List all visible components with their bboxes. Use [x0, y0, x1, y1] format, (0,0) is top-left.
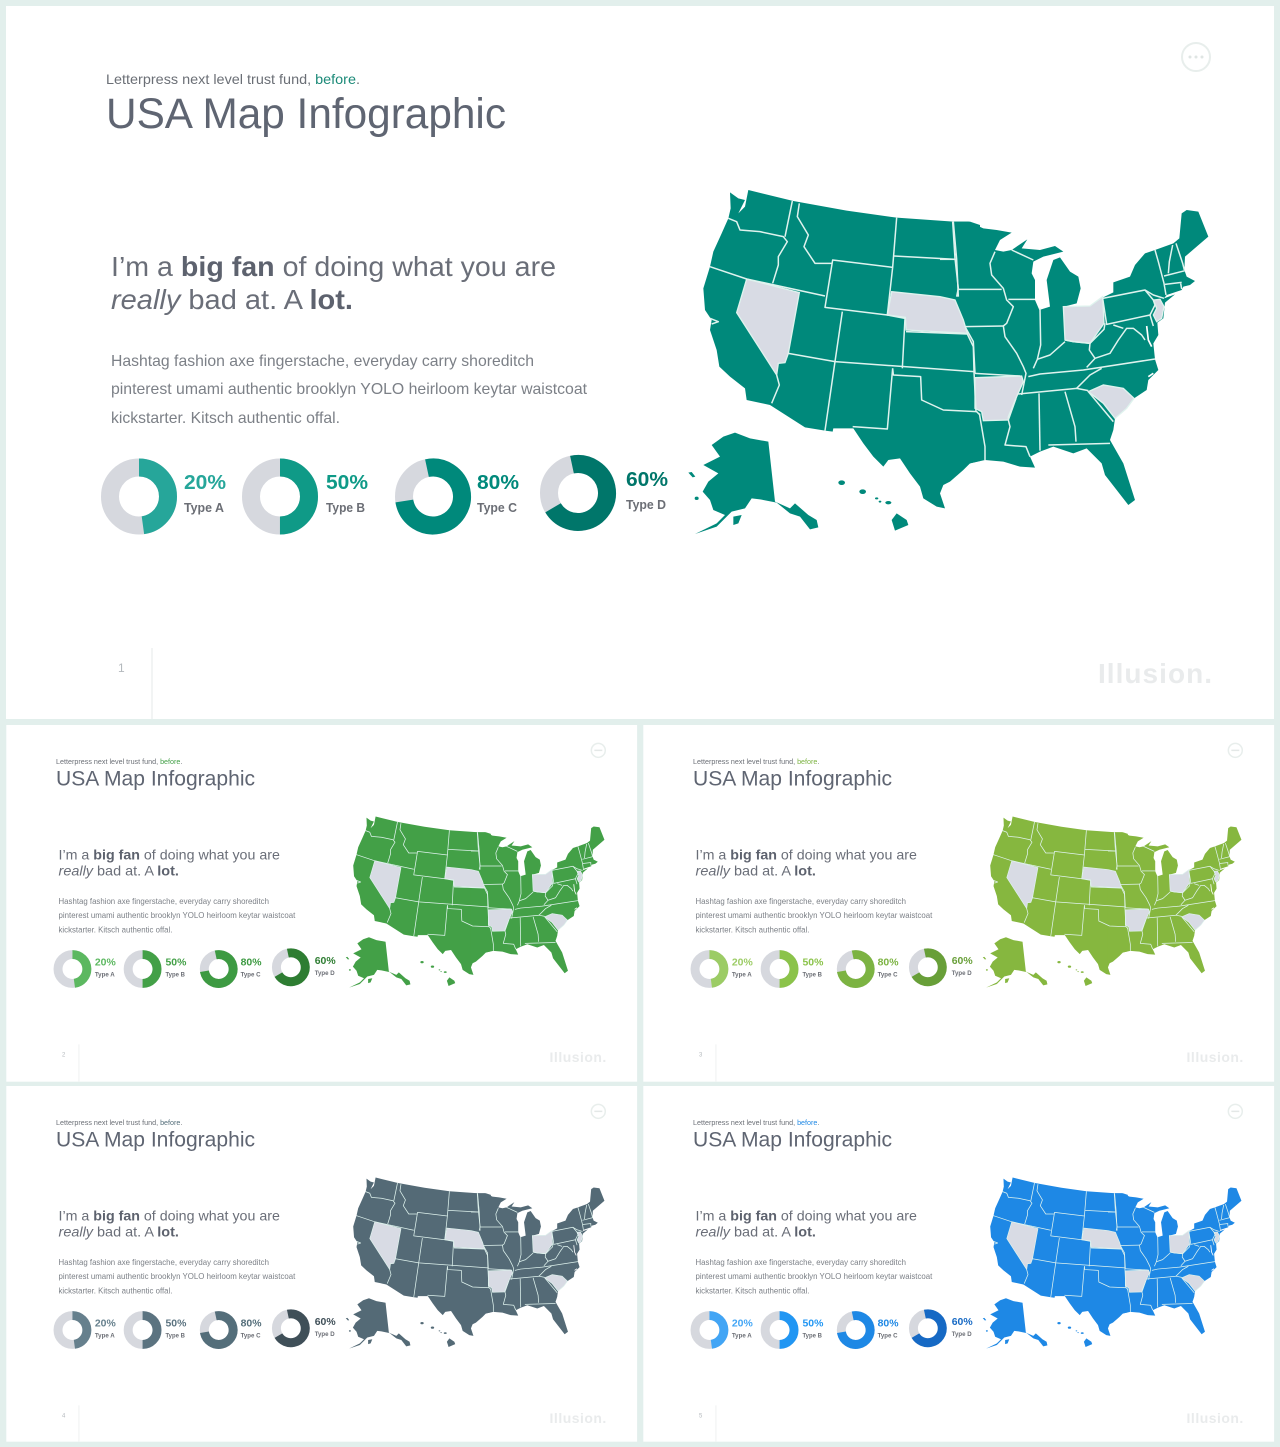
donut: Type B: 50%	[165, 1318, 187, 1329]
heading line two: really bad at. A lot.	[696, 863, 816, 879]
donut: Type D: 60%	[626, 469, 668, 491]
title: USA Map Infographic	[106, 90, 506, 138]
donut: Type C: Type C	[241, 972, 261, 979]
body text: Hashtag fashion axe fingerstache, everyday carry shoreditch	[59, 897, 269, 906]
body text: Hashtag fashion axe fingerstache, everyday carry shoreditch	[696, 1258, 906, 1267]
donut: Type A: 20%	[95, 957, 116, 968]
donut: Type A	[58, 1316, 116, 1344]
heading: I’m a big fan of doing what you are	[59, 846, 280, 862]
donut: Type B: Type B	[326, 501, 365, 515]
body text: Hashtag fashion axe fingerstache, everyday carry shoreditch	[59, 1258, 269, 1267]
title: USA Map Infographic	[693, 1128, 892, 1152]
panel: lime slide	[643, 725, 1274, 1082]
body text: Hashtag fashion axe fingerstache, everyday carry shoreditch	[696, 897, 906, 906]
subtitle: Letterpress next level trust fund, before.	[693, 759, 819, 766]
donut: Type D	[544, 459, 668, 527]
panel: blue slide	[643, 1086, 1274, 1442]
donut: Type D: 60%	[952, 956, 973, 967]
donut: Type B: Type B	[802, 1333, 822, 1340]
body text: Hashtag fashion axe fingerstache, everyday carry shoreditch	[111, 353, 534, 370]
title: USA Map Infographic	[56, 1128, 255, 1152]
donut: Type C: Type C	[477, 501, 517, 515]
donut: Type C	[839, 952, 899, 986]
body text: kickstarter. Kitsch authentic offal.	[59, 1286, 172, 1295]
donut: Type C	[202, 1313, 262, 1347]
donut: Type D: Type D	[626, 498, 666, 512]
donut: Type B: 50%	[802, 1318, 824, 1329]
heading line two: really bad at. A lot.	[111, 284, 353, 315]
donut: Type C: 80%	[477, 472, 519, 494]
donut: Type D	[274, 950, 336, 984]
panel: slate slide	[6, 1086, 637, 1442]
body text: kickstarter. Kitsch authentic offal.	[59, 925, 172, 934]
USA map	[983, 817, 1241, 988]
heading: I’m a big fan of doing what you are	[696, 846, 917, 862]
title: USA Map Infographic	[693, 767, 892, 791]
donut: Type B: 50%	[165, 957, 187, 968]
donut: Type B	[128, 955, 187, 983]
donut: Type C	[202, 952, 262, 986]
body text	[696, 1258, 933, 1295]
donut: Type A: Type A	[184, 501, 224, 515]
body text: kickstarter. Kitsch authentic offal.	[696, 1286, 809, 1295]
page number: 5	[699, 1413, 703, 1419]
donut: Type D: Type D	[315, 1331, 335, 1338]
donut: Type D	[911, 950, 973, 984]
USA map	[983, 1178, 1241, 1349]
logo: Illusion.	[1187, 1410, 1243, 1426]
body text: pinterest umami authentic brooklyn YOLO heirloom keytar waistcoat	[696, 911, 933, 920]
USA map	[346, 1178, 604, 1349]
donut: Type C	[399, 462, 519, 531]
donut: Type C: Type C	[878, 1333, 898, 1340]
donut: Type A	[695, 1316, 753, 1344]
donut: Type B: 50%	[802, 957, 824, 968]
heading: I’m a big fan of doing what you are	[111, 251, 556, 282]
logo: Illusion.	[1098, 658, 1212, 689]
body text	[111, 353, 588, 427]
title: USA Map Infographic	[56, 767, 255, 791]
donut: Type B: Type B	[802, 972, 822, 979]
heading line two: really bad at. A lot.	[59, 1224, 179, 1240]
donut: Type C: 80%	[241, 957, 262, 968]
logo: Illusion.	[550, 1410, 606, 1426]
donut: Type D: 60%	[315, 1317, 336, 1328]
donut: Type A	[58, 955, 116, 983]
donut: Type B	[765, 1316, 824, 1344]
donut: Type A: Type A	[732, 1333, 752, 1340]
subtitle: Letterpress next level trust fund, before.	[693, 1120, 819, 1127]
donut: Type C	[839, 1313, 899, 1347]
donut: Type A: 20%	[732, 957, 753, 968]
page number: 2	[62, 1052, 66, 1058]
donut: Type D	[274, 1311, 336, 1345]
donut: Type A: 20%	[95, 1318, 116, 1329]
page number: 4	[62, 1413, 66, 1419]
donut: Type A: 20%	[184, 472, 226, 494]
donut: Type B: Type B	[165, 972, 185, 979]
panel: green slide	[6, 725, 637, 1082]
donut: Type A: Type A	[732, 972, 752, 979]
logo: Illusion.	[1187, 1049, 1243, 1065]
icon: menu dots	[591, 1104, 605, 1118]
icon: menu dots	[591, 743, 605, 757]
panel: large teal slide	[6, 6, 1274, 719]
heading: I’m a big fan of doing what you are	[696, 1207, 917, 1223]
page number: 3	[699, 1052, 703, 1058]
logo: Illusion.	[550, 1049, 606, 1065]
body text: pinterest umami authentic brooklyn YOLO heirloom keytar waistcoat	[59, 1272, 296, 1281]
heading line two: really bad at. A lot.	[59, 863, 179, 879]
donut: Type C: 80%	[878, 957, 899, 968]
body text: pinterest umami authentic brooklyn YOLO heirloom keytar waistcoat	[696, 1272, 933, 1281]
subtitle: Letterpress next level trust fund, before.	[56, 759, 182, 766]
body text: pinterest umami authentic brooklyn YOLO heirloom keytar waistcoat	[59, 911, 296, 920]
donut: Type C: 80%	[878, 1318, 899, 1329]
donut: Type B: 50%	[326, 472, 368, 494]
donut: Type A: 20%	[732, 1318, 753, 1329]
body text	[696, 897, 933, 934]
donut: Type A	[110, 468, 226, 526]
donut: Type D: Type D	[315, 970, 335, 977]
donut: Type A: Type A	[95, 972, 115, 979]
donut: Type C: Type C	[878, 972, 898, 979]
donut: Type D: 60%	[952, 1317, 973, 1328]
subtitle: Letterpress next level trust fund, before.	[56, 1120, 182, 1127]
donut: Type D	[911, 1311, 973, 1345]
heading line two: really bad at. A lot.	[696, 1224, 816, 1240]
donut: Type A: Type A	[95, 1333, 115, 1340]
body text: kickstarter. Kitsch authentic offal.	[696, 925, 809, 934]
heading: I’m a big fan of doing what you are	[59, 1207, 280, 1223]
donut: Type D: Type D	[952, 970, 972, 977]
body text: pinterest umami authentic brooklyn YOLO heirloom keytar waistcoat	[111, 381, 588, 398]
donut: Type D: Type D	[952, 1331, 972, 1338]
donut: Type B	[128, 1316, 187, 1344]
donut: Type B: Type B	[165, 1333, 185, 1340]
donut: Type C: Type C	[241, 1333, 261, 1340]
icon: menu dots	[1182, 43, 1210, 71]
subtitle: Letterpress next level trust fund, before.	[106, 71, 360, 87]
body text	[59, 1258, 296, 1295]
donut: Type D: 60%	[315, 956, 336, 967]
USA map	[688, 190, 1208, 534]
donut: Type B	[251, 468, 368, 526]
icon: menu dots	[1228, 743, 1242, 757]
body text: kickstarter. Kitsch authentic offal.	[111, 410, 340, 427]
body text	[59, 897, 296, 934]
icon: menu dots	[1228, 1104, 1242, 1118]
page number: 1	[118, 661, 125, 675]
donut: Type B	[765, 955, 824, 983]
USA map	[346, 817, 604, 988]
donut: Type C: 80%	[241, 1318, 262, 1329]
donut: Type A	[695, 955, 753, 983]
